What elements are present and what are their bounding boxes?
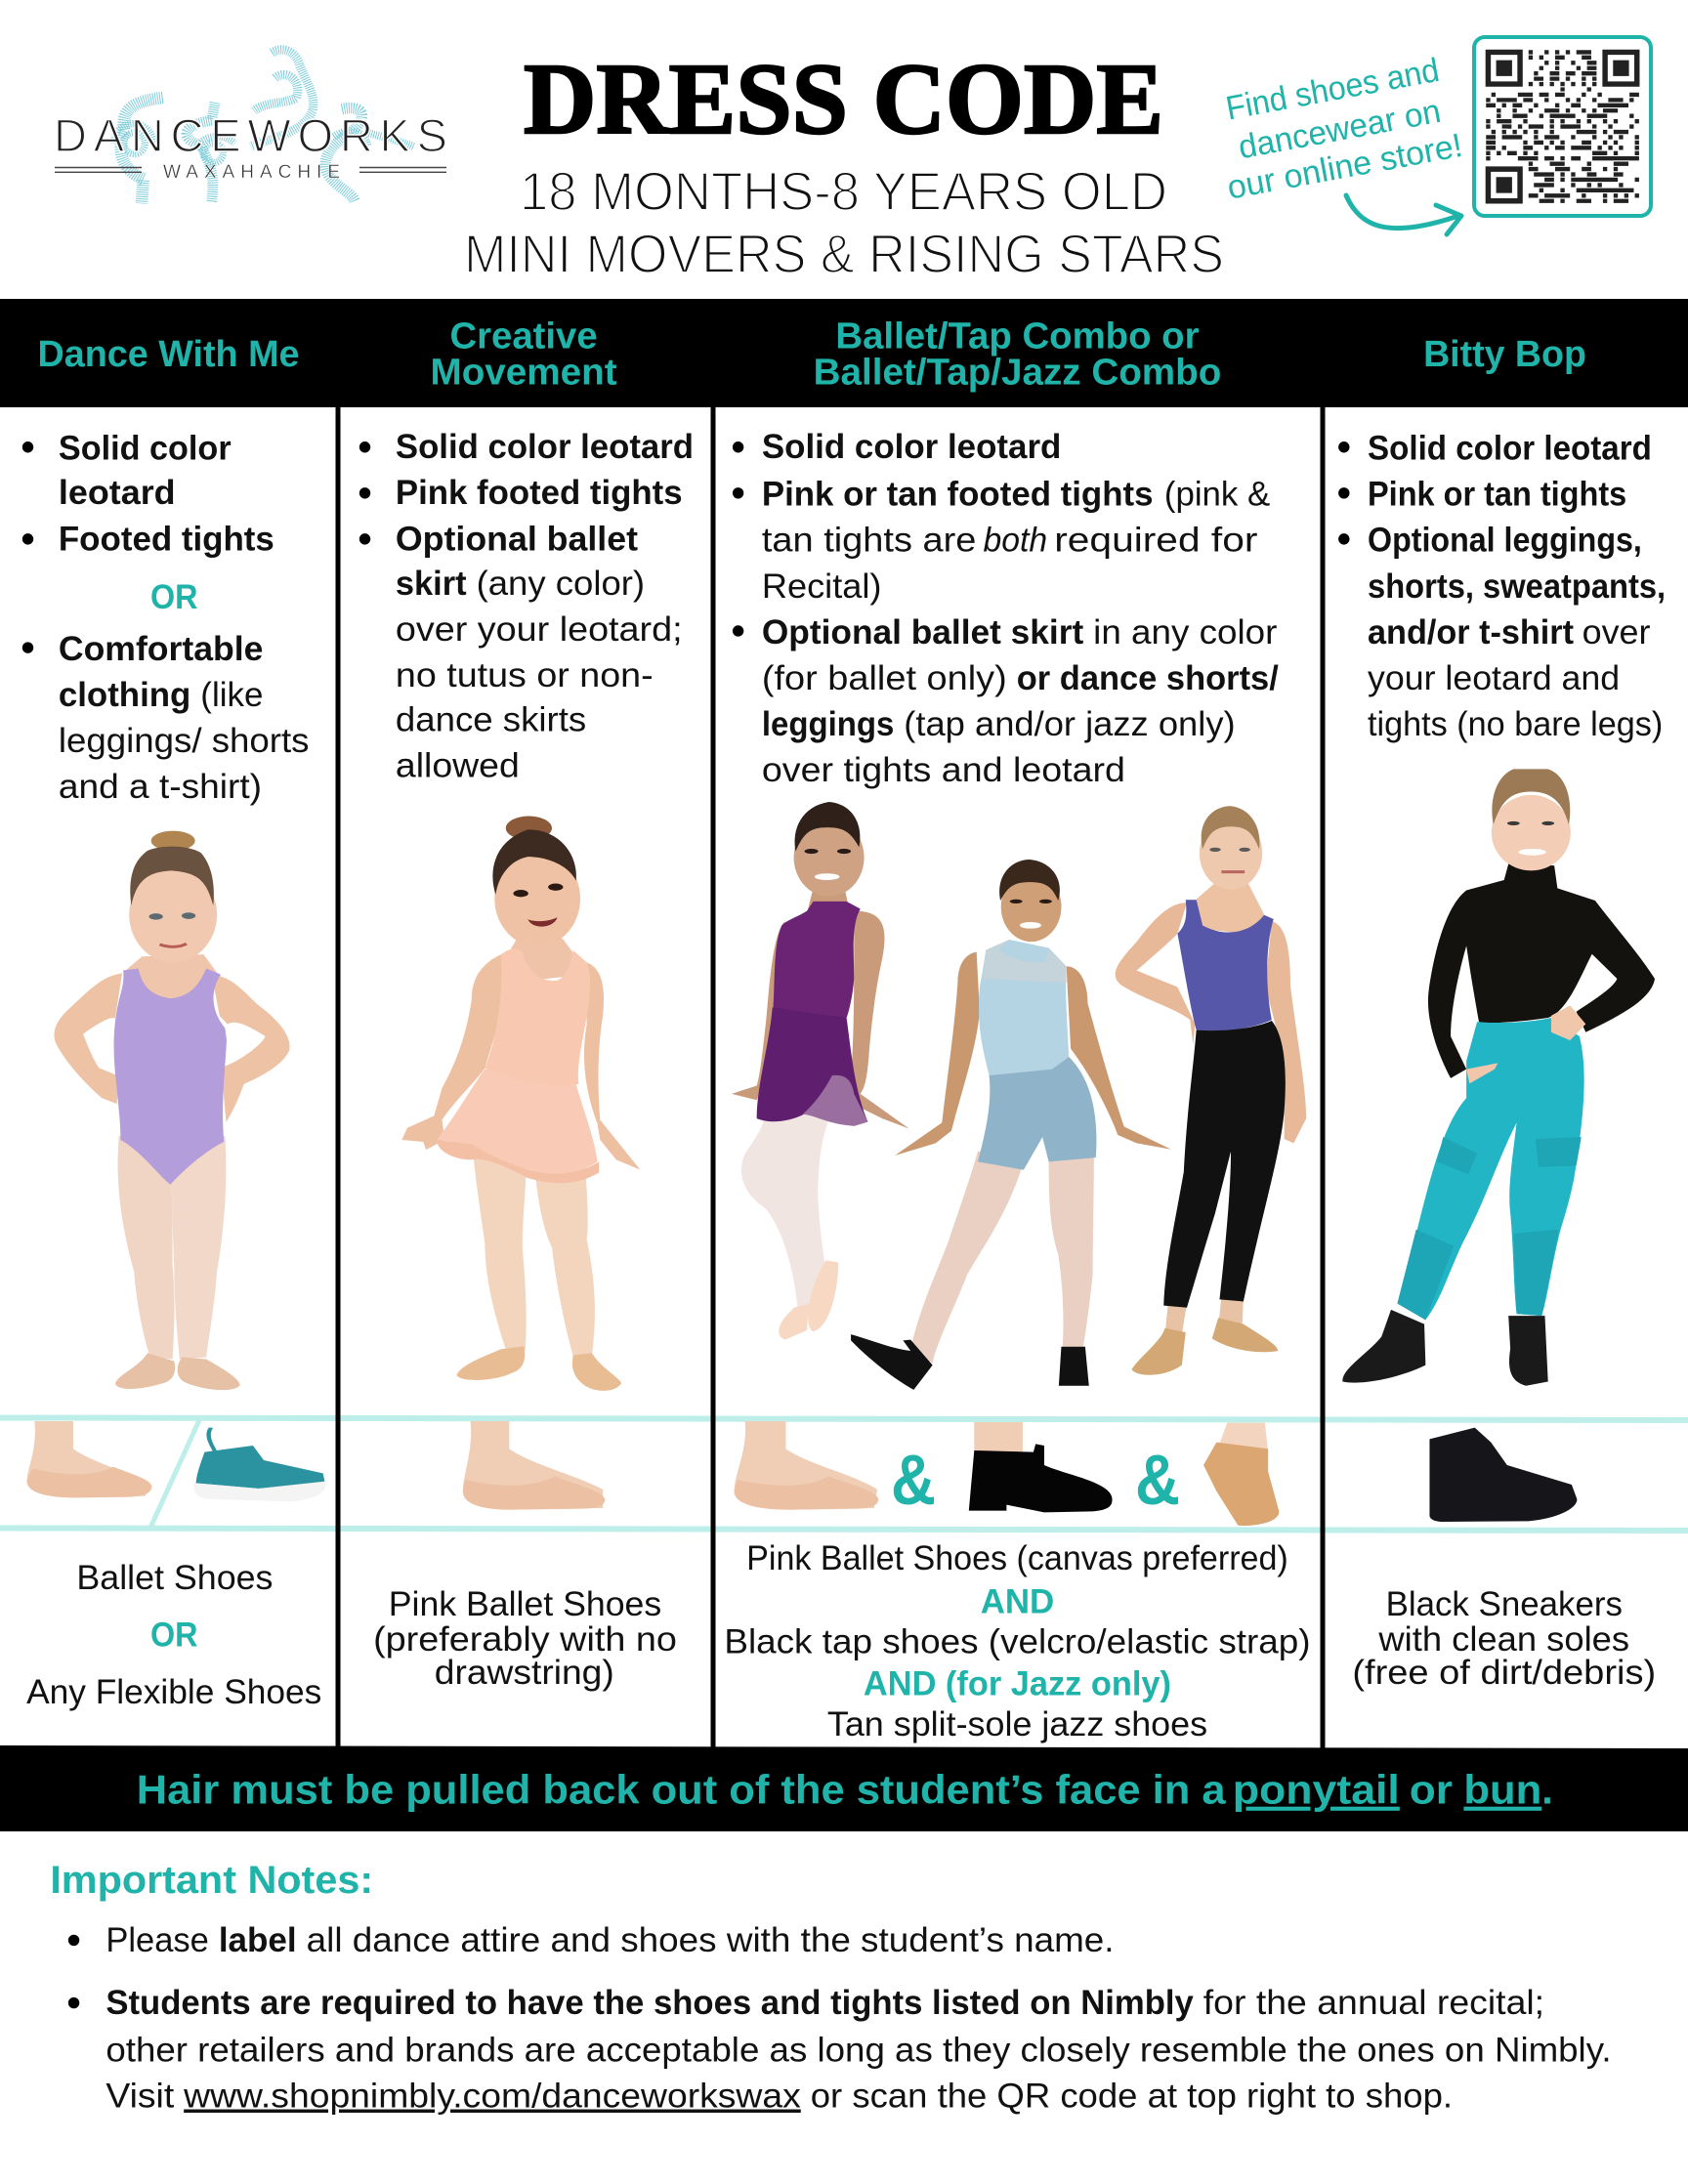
requirements: Creative Movement: Optional ballet (396, 520, 638, 558)
shoe caption: Ballet/Tap Combo: Black tap shoes (velcro/elastic strap) (724, 1623, 1311, 1661)
requirements: Ballet/Tap Combo: Optional ballet skirt (762, 613, 1084, 651)
shoe caption: Dance With Me: Ballet Shoes (76, 1559, 273, 1597)
shoe caption: Creative Movement: drawstring) (435, 1654, 614, 1692)
icon: ballet shoes and flexible shoes (27, 1420, 325, 1528)
requirements: Ballet/Tap Combo: both (984, 522, 1047, 560)
shoe caption: Bitty Bop: (free of dirt/debris) (1352, 1654, 1656, 1692)
note: required shoes and tights: other retailers and brands are acceptable as long as they closely resemble the ones on Nimbly. (106, 2031, 1612, 2069)
shoe caption: Bitty Bop: Black Sneakers (1386, 1585, 1623, 1623)
table column dividers (338, 407, 1323, 1748)
figure: child in black turtleneck and teal joggers (1342, 769, 1655, 1386)
requirements: Bitty Bop (1338, 430, 1666, 743)
hair banner (0, 1745, 1688, 1831)
note: required shoes and tights: or scan the QR code at top right to shop. (811, 2078, 1453, 2116)
note: required shoes and tights: Visit (106, 2078, 175, 2116)
requirements: Bitty Bop: over (1582, 613, 1651, 651)
requirements: Ballet/Tap Combo (733, 428, 1279, 789)
requirements: Dance With Me: Footed tights (59, 520, 274, 558)
note: required shoes and tights: Students are required to have the shoes and tights listed on Nimbly (106, 1984, 1194, 2022)
requirements: Creative Movement: no tutus or non- (396, 656, 654, 694)
note: required shoes and tights: www.shopnimbly.com/danceworkswax (183, 2078, 801, 2116)
requirements: Ballet/Tap Combo: required for (1054, 522, 1258, 560)
shoe caption: Bitty Bop: with clean soles (1377, 1620, 1629, 1659)
requirements: Ballet/Tap Combo: in any color (1093, 613, 1278, 651)
header band (0, 299, 1688, 407)
shoe caption: Creative Movement: (preferably with no (373, 1620, 677, 1659)
figure: child in pink leotard and skirt (401, 817, 640, 1391)
column heading: Dance With Me: Dance With Me (37, 334, 300, 375)
requirements: Bitty Bop: and/or t-shirt (1368, 613, 1574, 651)
icon: pink ballet shoe (463, 1421, 605, 1510)
column heading: Ballet/Tap Combo: Ballet/Tap Combo or (835, 315, 1200, 357)
callout: online store: dancewear on (1236, 93, 1444, 166)
callout: online store (1223, 52, 1465, 207)
shoe caption: Dance With Me: Any Flexible Shoes (26, 1673, 321, 1711)
requirements: Bitty Bop: your leotard and (1368, 659, 1620, 697)
note: labels: label (219, 1921, 297, 1959)
shoe caption: Ballet/Tap Combo: Tan split-sole jazz shoes (827, 1705, 1207, 1743)
requirements: Ballet/Tap Combo: (tap and/or jazz only) (904, 705, 1236, 743)
requirements: Creative Movement: allowed (396, 747, 520, 785)
requirements: Ballet/Tap Combo: (for ballet only) (762, 659, 1007, 697)
icon: black sneaker (1429, 1428, 1577, 1522)
column heading: Ballet/Tap Combo: Ballet/Tap/Jazz Combo (814, 353, 1221, 394)
hair banner: . (1541, 1768, 1553, 1813)
logo location: WAXAHACHIE (163, 162, 340, 183)
requirements: Ballet/Tap Combo: Solid color leotard (762, 428, 1061, 466)
important notes (50, 1859, 1612, 2116)
shoe caption: Ballet/Tap Combo: AND (981, 1582, 1054, 1620)
requirements: Dance With Me: leggings/ shorts (59, 722, 310, 760)
subtitle: age range: 18 MONTHS-8 YEARS OLD (520, 160, 1167, 222)
logo swirls (114, 50, 413, 203)
note: required shoes and tights: for the annual recital; (1203, 1984, 1544, 2022)
shoe caption: Ballet/Tap Combo: Pink Ballet Shoes (canvas preferred) (746, 1539, 1288, 1577)
requirements: Dance With Me: Comfortable (59, 630, 263, 668)
requirements: Creative Movement (359, 428, 694, 785)
shoe caption: Creative Movement: Pink Ballet Shoes (389, 1585, 661, 1623)
shoe caption: Ballet/Tap Combo (724, 1539, 1311, 1743)
logo: Danceworks Waxahachie (54, 50, 447, 203)
hair banner: Hair must be pulled back out of the student’s face in a (137, 1768, 1227, 1813)
requirements: Ballet/Tap Combo: leggings (762, 705, 894, 743)
requirements: Bitty Bop: Pink or tan tights (1368, 476, 1626, 514)
requirements: Dance With Me: Solid color (59, 430, 232, 468)
ampersand: & (891, 1442, 936, 1520)
requirements: Ballet/Tap Combo: over tights and leotard (762, 751, 1125, 789)
requirements: Creative Movement: Solid color leotard (396, 428, 694, 466)
arrow to QR code (1346, 195, 1461, 234)
requirements: Bitty Bop: shorts, sweatpants, (1368, 567, 1666, 606)
note: labels: all dance attire and shoes with the student’s name. (307, 1921, 1115, 1959)
note: labels: Please (106, 1921, 209, 1959)
requirements: Bitty Bop: Optional leggings, (1368, 522, 1642, 560)
requirements: Dance With Me: and a t-shirt) (59, 768, 262, 806)
requirements: Dance With Me: clothing (59, 676, 190, 714)
requirements: Creative Movement: dance skirts (396, 701, 586, 739)
ampersand: & (1135, 1442, 1180, 1520)
shoe caption: Ballet/Tap Combo: AND (for Jazz only) (864, 1664, 1171, 1702)
shoe caption: Bitty Bop (1352, 1585, 1656, 1692)
requirements: Ballet/Tap Combo: or dance shorts/ (1017, 659, 1279, 697)
hair banner: or (1410, 1768, 1453, 1813)
subtitle: class groups: MINI MOVERS & RISING STARS (464, 223, 1224, 284)
figure: dancer in indigo leotard and black leggings (1116, 806, 1306, 1375)
logo rules (55, 168, 446, 172)
requirements: Creative Movement: over your leotard; (396, 610, 683, 649)
requirements: Bitty Bop: tights (no bare legs) (1368, 705, 1663, 743)
column heading: Creative Movement (431, 315, 617, 394)
requirements: Ballet/Tap Combo: Recital) (762, 567, 881, 606)
figure: dancer in purple leotard and skirt (732, 802, 909, 1340)
QR code (1474, 37, 1651, 216)
shoe row borders (0, 1414, 1688, 1533)
figure: toddler in lilac leotard (54, 831, 290, 1390)
column heading: Creative Movement: Creative (450, 315, 598, 357)
hair banner: bun (1463, 1768, 1541, 1813)
shoe caption: Creative Movement (373, 1585, 677, 1692)
note: required shoes and tights (68, 1984, 1612, 2116)
callout: online store: Find shoes and (1223, 52, 1442, 127)
requirements: Dance With Me (22, 430, 310, 806)
shoe caption: Dance With Me (26, 1559, 321, 1711)
requirements: Ballet/Tap Combo: Pink or tan footed tights (762, 476, 1153, 514)
requirements: Ballet/Tap Combo: tan tights are (762, 522, 976, 560)
requirements: Dance With Me: leotard (59, 474, 176, 512)
requirements: Creative Movement: skirt (396, 565, 467, 603)
column heading: Ballet/Tap Combo (814, 315, 1221, 394)
shoe caption: Dance With Me: OR (150, 1617, 197, 1655)
requirements: Creative Movement: Pink footed tights (396, 474, 683, 512)
column heading: Bitty Bop: Bitty Bop (1423, 334, 1586, 375)
column heading: Creative Movement: Movement (431, 353, 617, 394)
figure: dancer in light blue leotard and shorts (851, 860, 1171, 1390)
requirements: Ballet/Tap Combo: (pink & (1164, 476, 1270, 514)
requirements: Bitty Bop: Solid color leotard (1368, 430, 1652, 468)
requirements: Dance With Me: (like (200, 676, 263, 714)
requirements: Dance With Me: OR (150, 578, 197, 616)
icon: combo shoes (735, 1421, 1279, 1526)
callout: online store: our online store! (1224, 127, 1465, 207)
hair banner: ponytail (1233, 1768, 1400, 1813)
requirements: Creative Movement: (any color) (477, 565, 645, 603)
notes heading: Important Notes: (50, 1859, 373, 1902)
title: DRESS CODE (524, 43, 1163, 155)
logo wordmark: DANCEWORKS (54, 109, 447, 161)
